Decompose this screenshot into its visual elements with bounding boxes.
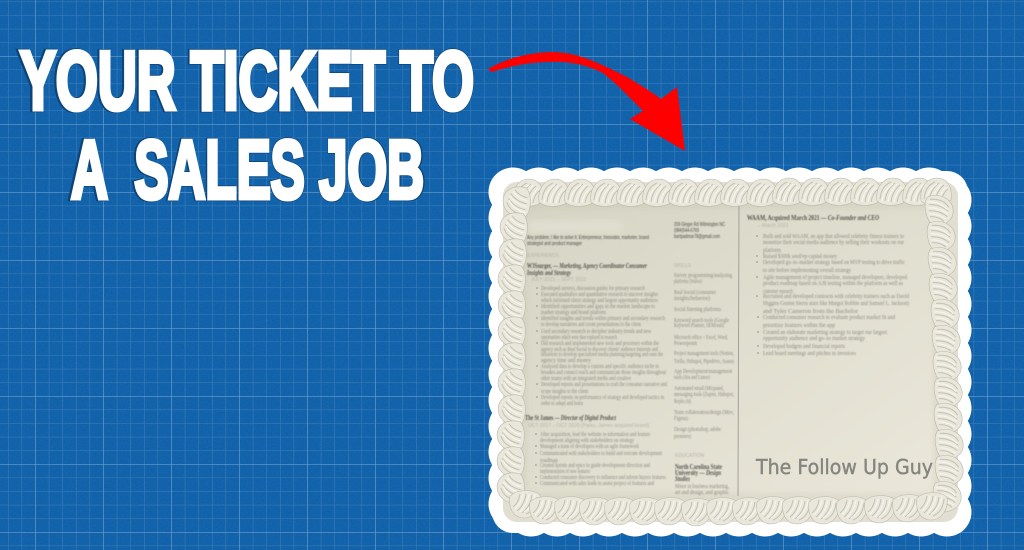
resume contact and skills column — [674, 222, 734, 496]
bullets: Recruited and developed contracts with celebrity trainers such as David — [763, 293, 910, 300]
skills: messaging tools (Zapier, Hubspot, — [674, 391, 734, 398]
education: North Carolina State — [675, 462, 723, 471]
job 1: Developed reports and presentations to craft the consumer narrative and — [541, 381, 668, 388]
bullets: Lead board meetings and pitches to investors — [763, 350, 856, 357]
skills: Trello, Hubspot, Pipedrive, Asana) — [674, 358, 734, 365]
skills: Keyword search tools (Google — [674, 317, 729, 324]
bullets: Built and sold WAAM, an app that allowed celebrity fitness trainers to — [763, 233, 904, 240]
skills: Keyword Planner, SEMrush) — [674, 322, 724, 329]
icing: right column — [923, 192, 965, 513]
job 1: Developed reports on performance of strategy and developed tactics in — [541, 394, 665, 401]
icing: left column — [496, 185, 532, 504]
job 1: opportunities which were then explored in research — [541, 334, 617, 341]
skills: Real Social (consumer — [674, 289, 717, 296]
job 2: Created sprints and epics to guide development direction and — [540, 462, 651, 469]
skills: Microsoft office – Excel, Word, — [674, 334, 728, 341]
bullet dots — [535, 235, 759, 484]
title line 1: YOUR TICKET TO — [20, 34, 474, 127]
skills: Social listening platforms — [674, 306, 721, 313]
job 1 — [526, 261, 668, 407]
skills: Project management tools (Notion, — [674, 350, 734, 357]
job 1: agency such as Real Social to discover clients' audience interests and — [541, 346, 659, 353]
bullets: product roadmap based on A/B testing within the platform as well as — [763, 280, 903, 287]
job 1: broaden and connect reach and communicate those insights throughout — [541, 369, 666, 376]
title — [18, 34, 474, 216]
intro: strategist and product manager — [527, 241, 582, 247]
job 2: development aligning with stakeholders on strategy — [540, 437, 635, 444]
bullets: to site before implementing overall strategy — [763, 267, 852, 274]
job 1: agency time and money — [541, 357, 592, 364]
resume right column — [747, 213, 910, 357]
education: Studies — [675, 474, 690, 483]
job 2: Managed a team of developers with an agile framework — [540, 443, 640, 450]
bullets: prioritize features within the app — [763, 322, 835, 329]
skills — [674, 263, 734, 440]
intro: EXPERIENCE — [527, 253, 560, 259]
panel: resume paper on cake — [518, 200, 942, 502]
contact — [674, 222, 725, 240]
icing border — [496, 178, 965, 526]
handwritten caption: The Follow Up Guy — [755, 455, 933, 479]
title line 1: YOUR TICKET TO — [18, 34, 474, 127]
resume left column — [525, 235, 668, 487]
bullets: platform — [763, 247, 781, 254]
job 1: to develop narratives and create presentations to the client — [541, 321, 641, 328]
heading: WAAM, Acquired March 2021 — Co-Founder and CEO — [747, 213, 879, 222]
job 2: implementation of new features — [540, 468, 590, 475]
job 2: roadmap — [540, 457, 558, 464]
job 2: Conducted consumer discovery to influence and inform buyers features — [540, 474, 666, 481]
job 1: Used secondary research to decipher industry trends and new — [541, 328, 651, 335]
job 1: Identified opportunities and gaps in the market landscape to — [541, 303, 655, 310]
job 1: Analyzed data to develop a custom and specific audience niche to — [541, 363, 659, 370]
bullets: customer research — [763, 288, 794, 295]
skills: Powerpoint — [674, 340, 697, 347]
bullets — [763, 233, 910, 357]
icing: bottom row — [510, 491, 947, 526]
bullets: Raised $300k seed/vp capital money — [763, 253, 838, 260]
title line 2: A SALES JOB — [69, 123, 425, 216]
bullets: Conducted consumer research to evaluate product market fit and — [763, 314, 896, 321]
divider — [738, 204, 739, 496]
education: EDUCATION — [675, 453, 704, 459]
skills: Replo.ch) — [674, 398, 691, 405]
bullets: Created an elaborate marketing strategy to target our largest — [763, 329, 887, 336]
job 1: JULY 2021 – SEPT 2022 — [531, 277, 587, 283]
job 2: The St James — Director of Digital Product — [525, 413, 617, 422]
skills: tools (Jira and Linear) — [674, 374, 710, 381]
skills: insights/behavior) — [674, 295, 710, 302]
bullets: Developed go–to–market strategy based on MVP testing to drive traffic — [763, 259, 905, 266]
icing: top row — [513, 178, 951, 206]
resume right column: – March 2021 — [758, 223, 789, 229]
job 2: Communicated with stakeholders to build and execute development — [540, 450, 662, 457]
title line 2 — [69, 123, 425, 216]
intro: Any problem, I like to solve it. Entrepreneur, Innovator, marketer, brand — [527, 235, 649, 241]
sticker: white scalloped outline — [513, 192, 947, 512]
arrow: red curved arrow pointing to cake — [488, 52, 685, 151]
skills: Figma) — [674, 415, 688, 422]
bullets: Higgins Grainn Sierra stars like Margot Robbie and Samuel L. Jackson) — [763, 300, 909, 307]
contact: bartpadmar78@gmail.com — [674, 234, 720, 240]
skills: Automated email (Mixpanel, — [674, 385, 724, 392]
bullets: opportunity audience and go–to market strategy — [763, 335, 866, 342]
job 1: Identified insights and trends within primary and secondary research — [541, 315, 666, 322]
education: Minor in business marketing, — [675, 483, 729, 490]
skills: Team collaboration/design (Miro, — [674, 409, 734, 416]
job 2: After acquisition, lead the website re-information and feature — [540, 431, 650, 438]
skills: App Development/management — [674, 368, 732, 375]
job 1: which informed client strategy and largest opportunity audiences — [541, 297, 658, 304]
bullets: and Tyler Cameron from the Bachelor — [763, 308, 859, 315]
job 1: W3Ssurger, — Marketing, Agency Coordinator Consumer — [527, 261, 647, 270]
job 1: Did research and implemented new tools and processes within the — [541, 340, 659, 347]
title line 1 — [18, 34, 474, 127]
job 1: order to adapt and learn — [541, 400, 584, 407]
bullets: monetize their social media audience by selling their workouts on our — [763, 239, 905, 246]
intro — [527, 235, 649, 259]
cake base — [503, 182, 958, 522]
contact: (984)544-6769 — [674, 228, 699, 234]
job 2: Communicated with sales leads to assist project of features and — [540, 480, 655, 487]
education: art and design, and graphic — [675, 489, 729, 496]
job 1: Insights and Strategy — [526, 268, 571, 277]
bullets: Agile management of project timeline, managed developers, developed — [763, 274, 908, 281]
job 1: scope insights to the client — [541, 388, 588, 395]
skills: Design (photoshop, adobe — [674, 426, 721, 433]
title line 2: A SALES JOB — [71, 123, 424, 216]
job 2: OCT 2017 – OCT 2020 (Parks, James acquired brand) — [528, 423, 650, 429]
skills: Survey programming/analyzing — [674, 272, 733, 279]
skills: SKILLS — [674, 263, 692, 269]
bullets: Developed budgets and financial reports — [763, 343, 845, 350]
education — [675, 453, 729, 496]
job 1: other teams with an integrated media and creative — [541, 375, 631, 382]
skills: premiere) — [674, 433, 691, 440]
job 1: Developed surveys, discussion guides for primary research — [541, 285, 646, 292]
skills: platforms (Wufoo) — [674, 278, 702, 285]
job 1: market strategy and brand platform — [541, 309, 606, 316]
contact: 209 Ginger Rd Wilmington NC — [674, 222, 725, 228]
job 1: behaviors to develop specialized media planning/targeting and earn the — [541, 351, 663, 358]
education: University — Design — [675, 468, 721, 477]
job 2 — [525, 413, 666, 487]
job 1: Executed qualitative and quantitative research to uncover insights — [541, 291, 658, 298]
